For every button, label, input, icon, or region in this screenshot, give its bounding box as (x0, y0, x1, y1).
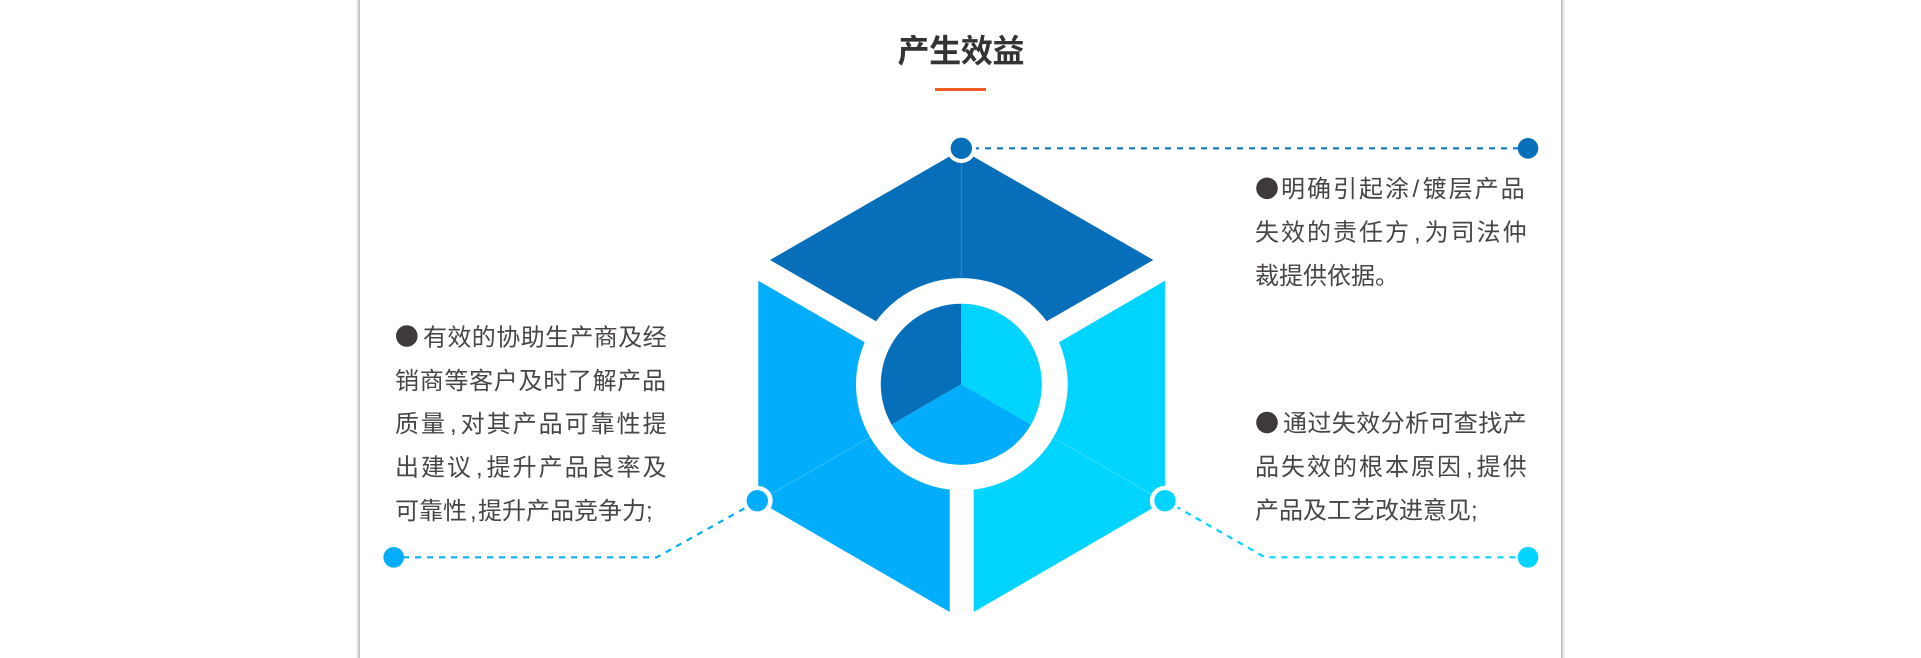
connector: lower right dashed line (1175, 506, 1520, 557)
text block: suppliers and quality: 有效的协助生产商及经 (423, 324, 667, 352)
panel: white page with shadowed edges (360, 0, 1561, 658)
text block: suppliers and quality (395, 324, 669, 525)
text block: suppliers and quality: 可靠性,提升产品竞争力; (395, 498, 653, 525)
connector: top right dashed line (973, 147, 1520, 149)
text block: suppliers and quality: 质量,对其产品可靠性提 (395, 411, 669, 438)
title underline (935, 88, 986, 91)
text block: suppliers and quality: 出建议,提升产品良率及 (395, 454, 669, 482)
hexagon: left face (758, 281, 950, 612)
text block: root cause: 品失效的根本原因,提供 (1255, 454, 1529, 481)
node: lower left (743, 486, 773, 515)
text block: suppliers and quality: 销商等客户及时了解产品 (395, 368, 667, 395)
endpoint: lower right (1518, 547, 1538, 568)
text block: responsibility: 明确引起涂/镀层产品 (1281, 176, 1527, 203)
endpoint: lower left (383, 547, 404, 568)
connector: lower left dashed line (403, 507, 747, 557)
text block: responsibility: 失效的责任方,为司法仲 (1255, 220, 1529, 246)
center circle: three segments (881, 304, 1042, 465)
text block: responsibility: 裁提供依据。 (1255, 263, 1399, 290)
node: top (947, 134, 976, 163)
title: 产生效益 (898, 33, 1024, 69)
node: lower right (1150, 486, 1179, 515)
hexagon: right face (974, 281, 1165, 612)
hexagon: top face (770, 150, 1153, 321)
text block: root cause: 产品及工艺改进意见; (1255, 498, 1478, 524)
endpoint: top right (1518, 138, 1538, 159)
text block: root cause: 通过失效分析可查找产 (1283, 410, 1527, 438)
text block: responsibility (1255, 176, 1529, 290)
text block: root cause (1255, 410, 1529, 524)
